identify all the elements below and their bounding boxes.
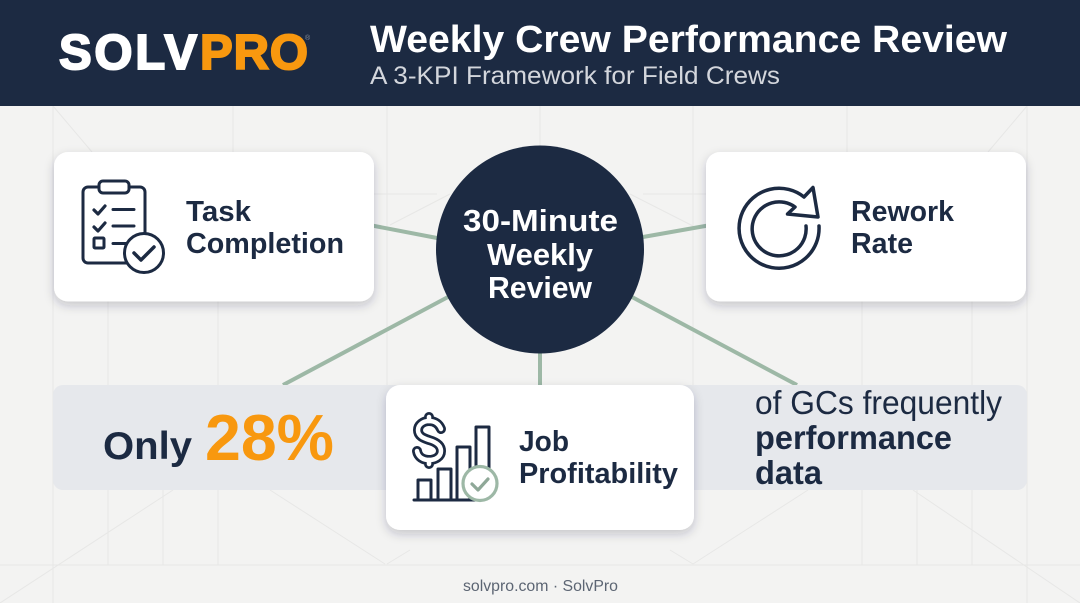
stat description: data [755, 454, 823, 491]
logo: SOLV [59, 26, 197, 80]
label: Job [519, 426, 569, 458]
panel: task completion [54, 152, 374, 302]
logo: PRO [200, 26, 308, 80]
hub text [463, 203, 618, 305]
stat band: left [53, 385, 413, 490]
connector lines [283, 226, 797, 387]
label: Task [186, 196, 252, 228]
stat description: performance [755, 419, 952, 456]
label [186, 196, 344, 260]
label [851, 196, 955, 260]
stat label: Only [103, 425, 192, 468]
footer: solvpro.com · SolvPro [463, 578, 618, 595]
logo: ® [305, 34, 311, 42]
title: Weekly Crew Performance Review [370, 19, 1007, 61]
icon: circular arrow [739, 188, 819, 268]
stat description: of GCs frequently [755, 384, 1002, 421]
hub text: 30-Minute [463, 203, 618, 238]
label: Completion [186, 228, 344, 260]
center hub [436, 146, 644, 354]
label: Rate [851, 228, 913, 260]
logo [59, 26, 311, 80]
label: Profitability [519, 458, 678, 490]
subtitle: A 3-KPI Framework for Field Crews [370, 62, 780, 90]
header bar [0, 0, 1080, 106]
panel: rework rate [706, 152, 1026, 302]
stat number: 28% [205, 401, 334, 474]
hub text: Weekly [487, 237, 594, 272]
stat description [755, 384, 1002, 491]
label: Rework [851, 196, 955, 228]
stat band: right [667, 384, 1027, 491]
hub text: Review [488, 270, 593, 305]
label [519, 426, 678, 490]
icon: dollar and bars [414, 417, 497, 500]
panel: job profitability [386, 385, 694, 530]
icon: clipboard [83, 181, 164, 272]
